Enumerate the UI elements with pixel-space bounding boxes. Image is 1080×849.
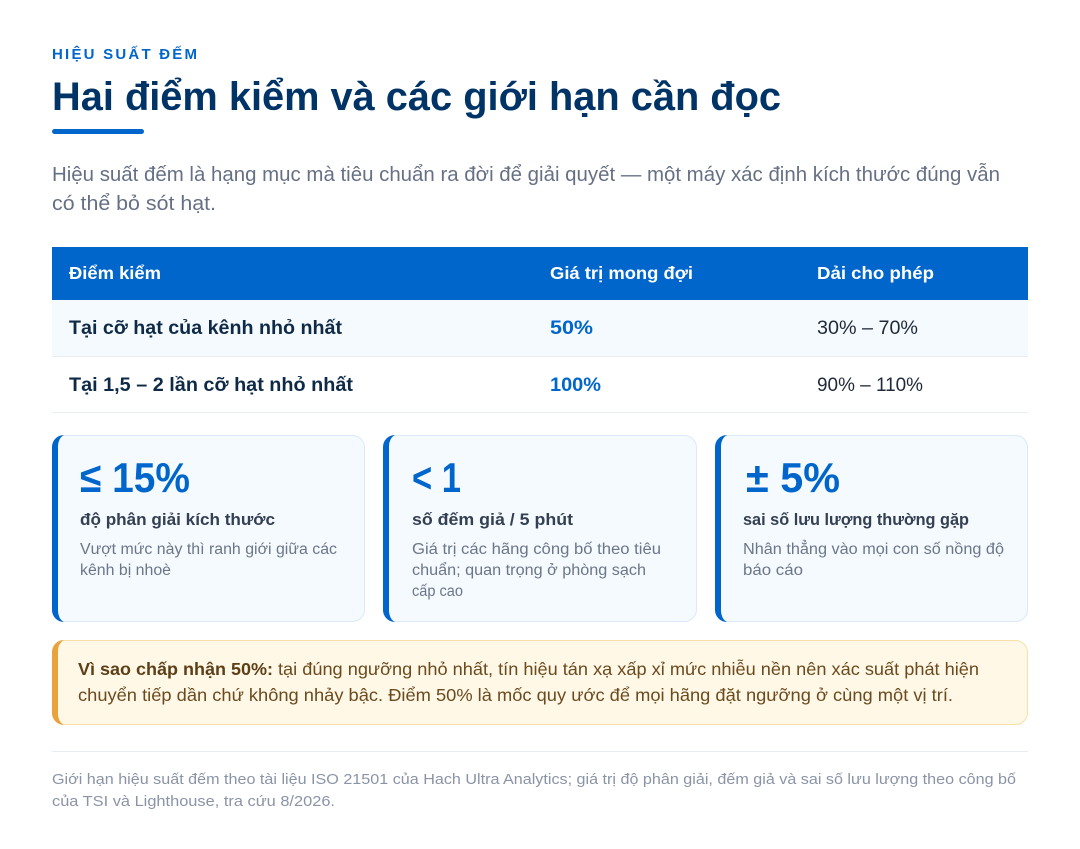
table header (52, 247, 1028, 300)
table row: smallest channel: Tại cỡ hạt của kênh nhỏ nhất (69, 318, 343, 339)
footer divider (52, 751, 1028, 752)
callout: chuyển tiếp dần chứ không nhảy bậc. Điểm 50% là mốc quy ước để mọi hãng đặt ngưỡng ở cùng một vị trí. (78, 685, 953, 705)
card: resolution: ≤ 15% (80, 454, 190, 501)
card: flow error: ± 5% (746, 454, 840, 501)
table row: 1.5 to 2 times: Tại 1,5 – 2 lần cỡ hạt nhỏ nhất (69, 375, 354, 396)
table (52, 247, 1028, 413)
table row: 1.5 to 2 times: 100% (550, 375, 601, 396)
card: flow error: Nhân thẳng vào mọi con số nồng độ (743, 540, 1004, 558)
table header: Giá trị mong đợi (550, 263, 693, 283)
title: Hai điểm kiểm và các giới hạn cần đọc (52, 75, 781, 119)
intro text: Hiệu suất đếm là hạng mục mà tiêu chuẩn ra đời để giải quyết — một máy xác định kích thước đúng vẫn (52, 163, 1000, 186)
card: flow error (715, 435, 1028, 622)
card: resolution (52, 435, 364, 622)
callout (52, 640, 1028, 725)
source note: Giới hạn hiệu suất đếm theo tài liệu ISO 21501 của Hach Ultra Analytics; giá trị độ phân giải, đếm giả và sai số lưu lượng theo công bố (52, 771, 1017, 788)
table row: smallest channel: 30% – 70% (817, 318, 918, 339)
source note: của TSI và Lighthouse, tra cứu 8/2026. (52, 793, 335, 810)
table row: smallest channel: 50% (550, 318, 593, 339)
card: resolution: độ phân giải kích thước (80, 510, 275, 529)
card: resolution: kênh bị nhoè (80, 562, 171, 579)
card: false count: Giá trị các hãng công bố theo tiêu (412, 541, 661, 558)
callout: Vì sao chấp nhận 50%: (78, 659, 273, 679)
card: flow error: báo cáo (743, 562, 803, 579)
intro text (52, 163, 1000, 215)
card: false count (383, 435, 696, 622)
eyebrow label: HIỆU SUẤT ĐẾM (52, 45, 197, 63)
card: false count: < 1 (412, 454, 461, 501)
intro text: có thể bỏ sót hạt. (52, 193, 216, 215)
card: resolution: Vượt mức này thì ranh giới giữa các (80, 541, 337, 558)
source note (52, 771, 1017, 810)
card: false count: cấp cao (412, 583, 463, 600)
title accent bar (52, 129, 144, 134)
table row: 1.5 to 2 times: 90% – 110% (817, 375, 923, 396)
table header: Điểm kiểm (69, 263, 161, 283)
table row: 1.5 to 2 times (52, 375, 1028, 413)
card: flow error: sai số lưu lượng thường gặp (743, 510, 969, 529)
table header: Dải cho phép (817, 263, 934, 283)
callout: tại đúng ngưỡng nhỏ nhất, tín hiệu tán xạ xấp xỉ mức nhiễu nền nên xác suất phát hiện (278, 658, 979, 679)
card: false count: số đếm giả / 5 phút (412, 510, 573, 529)
table row: smallest channel (52, 300, 1028, 357)
card: false count: chuẩn; quan trọng ở phòng sạch (412, 562, 646, 579)
